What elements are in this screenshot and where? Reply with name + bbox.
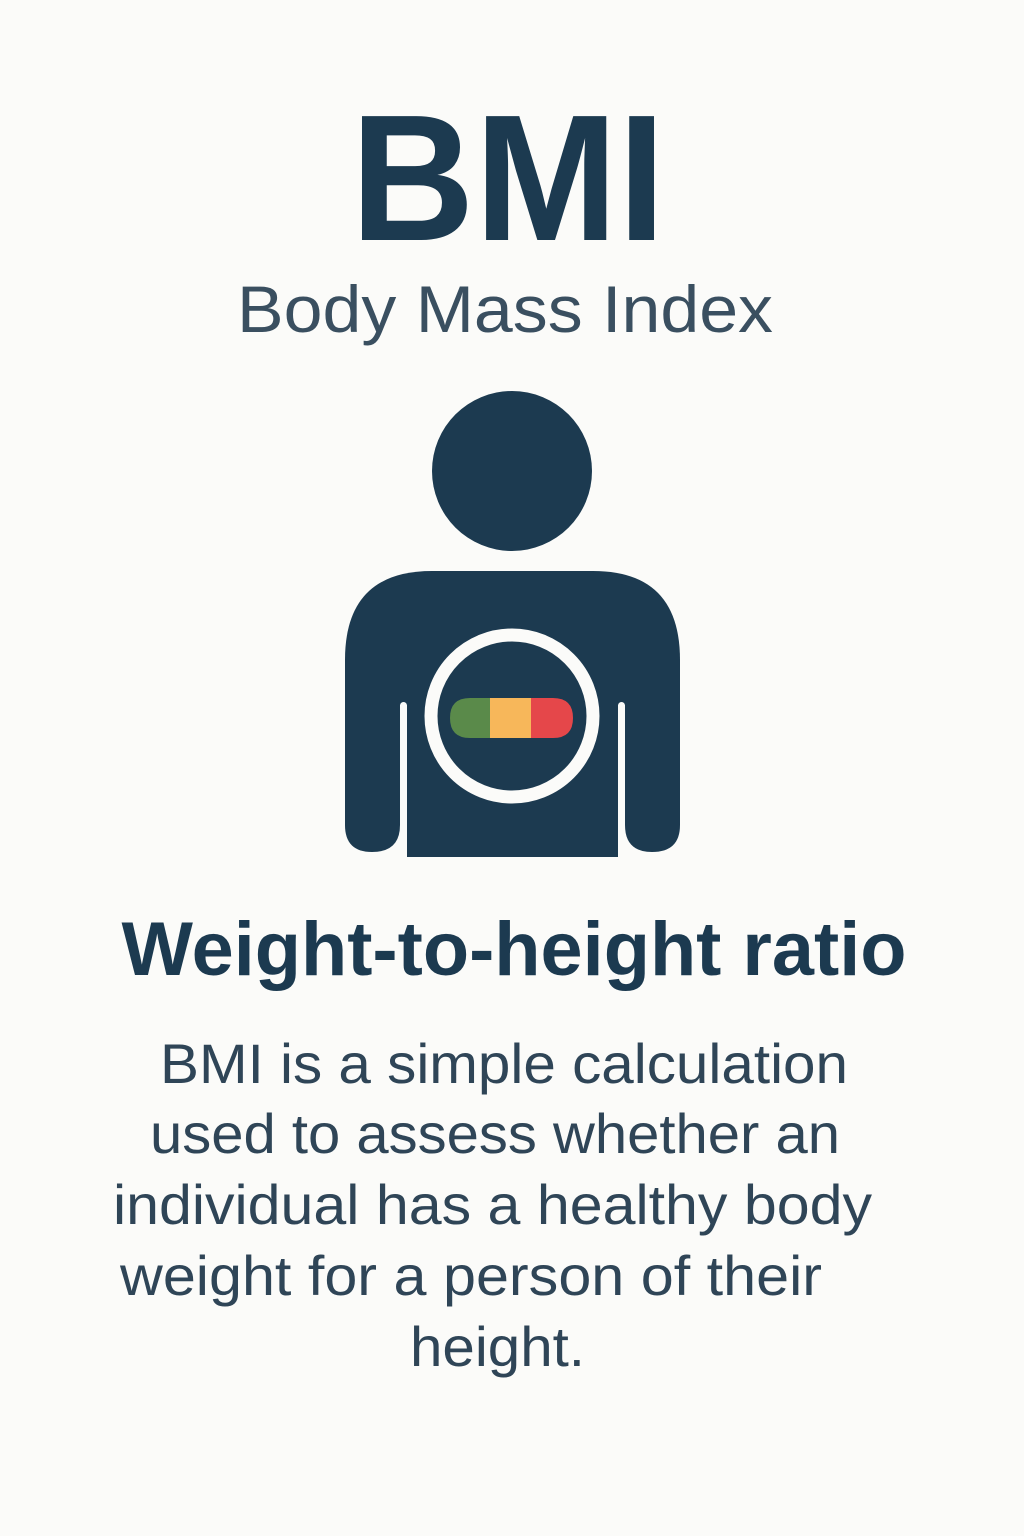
icon: color scale pill [450, 698, 573, 738]
icon: head [432, 391, 592, 551]
heading: Weight-to-height ratio [122, 907, 906, 992]
text block: description [113, 1032, 872, 1378]
text block: description: used to assess whether an [150, 1102, 840, 1165]
icon: person with BMI gauge [345, 391, 680, 867]
text block: description: weight for a person of their [119, 1244, 822, 1307]
text block: description: BMI is a simple calculation [160, 1032, 848, 1095]
title: BMI [350, 78, 666, 279]
icon: gauge ring [431, 635, 593, 797]
icon: body [345, 571, 680, 857]
subtitle: Body Mass Index [237, 272, 773, 346]
text block: description: individual has a healthy body [113, 1173, 872, 1236]
text block: description: height. [410, 1315, 585, 1378]
